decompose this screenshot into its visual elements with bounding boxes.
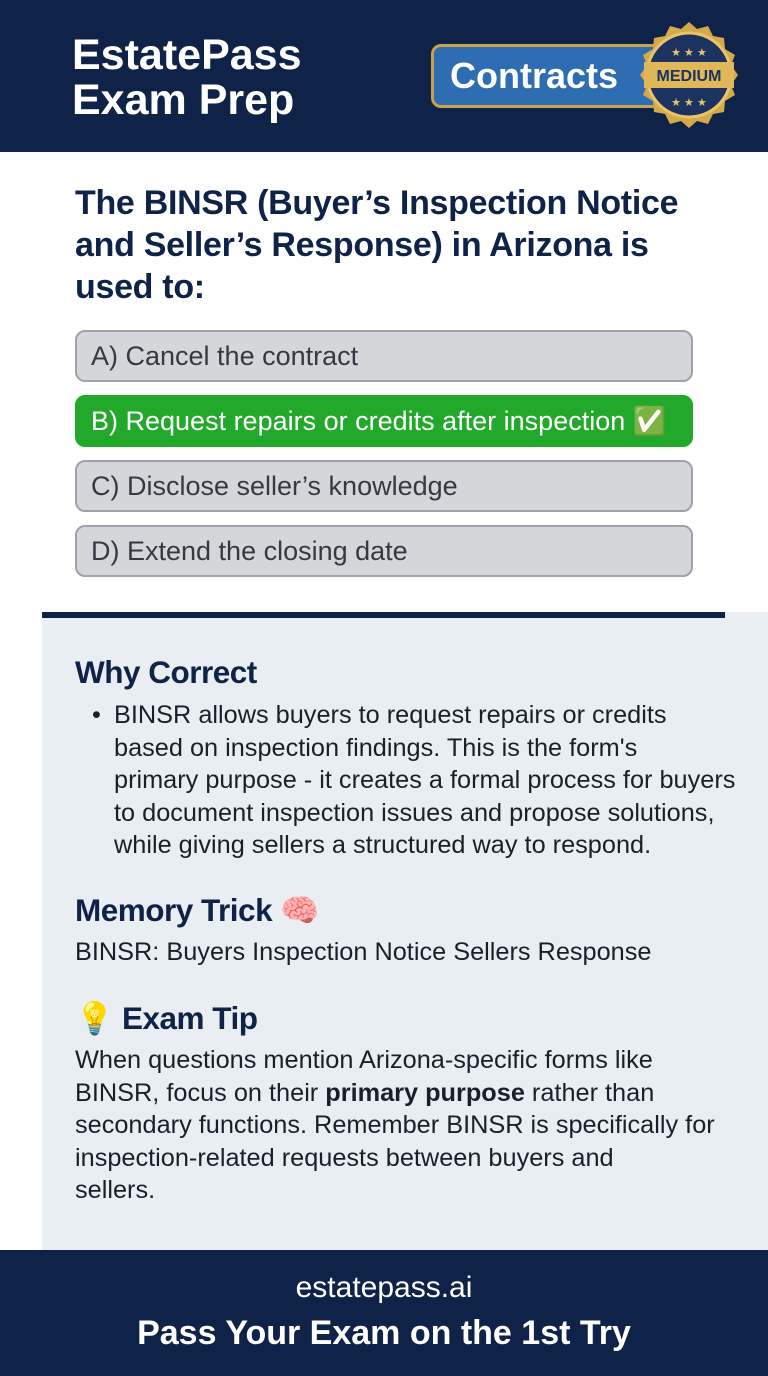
option A: A) Cancel the contract <box>91 341 358 371</box>
brand title: EstatePass <box>72 31 302 79</box>
question: The BINSR (Buyer’s Inspection Notice <box>75 184 678 222</box>
option C: C) Disclose seller’s knowledge <box>91 471 458 501</box>
difficulty seal: ★ ★ ★ <box>671 97 707 109</box>
brand title: Exam Prep <box>72 76 294 124</box>
difficulty seal: ★ ★ ★ <box>671 47 707 59</box>
why correct text <box>92 701 735 859</box>
explanation panel <box>42 612 768 1250</box>
option A <box>75 330 693 382</box>
why correct text: BINSR allows buyers to request repairs or credits <box>114 701 667 729</box>
option D <box>75 525 693 577</box>
footer <box>0 1250 768 1376</box>
footer tagline: Pass Your Exam on the 1st Try <box>137 1314 631 1352</box>
option B correct: B) Request repairs or credits after inspection ✅ <box>91 406 666 436</box>
header <box>0 0 768 152</box>
memory trick text: BINSR: Buyers Inspection Notice Sellers Response <box>75 938 651 966</box>
footer url: estatepass.ai <box>296 1271 472 1304</box>
heading: why correct: Why Correct <box>75 654 257 690</box>
category badge <box>431 44 663 108</box>
option C <box>75 460 693 512</box>
difficulty seal: MEDIUM <box>657 68 721 85</box>
why correct text: based on inspection findings. This is the form's <box>114 734 637 762</box>
exam tip text: secondary functions. Remember BINSR is specifically for <box>75 1111 715 1139</box>
option B correct <box>75 395 693 447</box>
why correct text: to document inspection issues and propose solutions, <box>114 799 714 827</box>
exam tip text: BINSR, focus on their primary purpose rather than <box>75 1079 654 1107</box>
brand title <box>72 31 302 124</box>
exam tip text: sellers. <box>75 1176 155 1204</box>
why correct text: primary purpose - it creates a formal process for buyers <box>114 766 735 794</box>
exam tip text <box>75 1046 715 1204</box>
question: used to: <box>75 268 205 306</box>
exam tip text: When questions mention Arizona-specific forms like <box>75 1046 653 1074</box>
difficulty seal <box>640 22 738 128</box>
why correct text: • <box>92 701 101 729</box>
heading: exam tip: 💡 Exam Tip <box>75 1000 257 1036</box>
question: and Seller’s Response) in Arizona is <box>75 226 649 264</box>
why correct text: while giving sellers a structured way to respond. <box>114 831 651 859</box>
exam tip text: inspection-related requests between buyers and <box>75 1144 614 1172</box>
heading: memory trick: Memory Trick 🧠 <box>75 892 319 928</box>
question <box>75 184 678 306</box>
category badge: Contracts <box>450 55 618 96</box>
option D: D) Extend the closing date <box>91 536 408 566</box>
